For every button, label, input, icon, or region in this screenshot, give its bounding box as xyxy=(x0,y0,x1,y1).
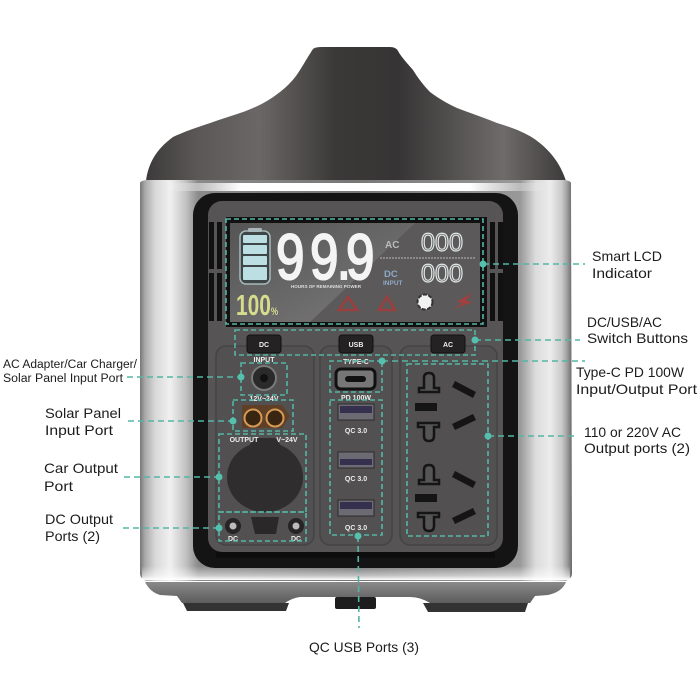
DC button xyxy=(247,335,281,353)
AC outlets xyxy=(415,373,476,531)
DC output ports: DC xyxy=(228,536,238,543)
vents right xyxy=(490,222,503,321)
device: power station xyxy=(140,47,572,612)
battery hours 99.9: 9 xyxy=(310,223,338,293)
front panel xyxy=(208,201,503,552)
percentage 100%: 100% xyxy=(236,290,278,322)
callout: solar input: Solar Panel xyxy=(45,405,121,421)
callout: AC adapter input: Solar Panel Input Port xyxy=(3,373,124,385)
callout: switch buttons xyxy=(235,314,688,355)
battery icon xyxy=(240,228,270,284)
callout: Type-C xyxy=(330,358,697,397)
input port: INPUT xyxy=(254,357,275,364)
solar panel port: 12V~24V xyxy=(250,396,279,403)
callout: AC adapter input xyxy=(3,359,287,395)
callout: Smart LCD Indicator: Smart LCD xyxy=(592,248,662,264)
car output port xyxy=(227,437,303,512)
callout: DC output: Ports (2) xyxy=(45,528,100,544)
hours caption: HOURS OF REMAINING POWER xyxy=(291,284,362,289)
lightning icon xyxy=(453,293,473,309)
foot right xyxy=(423,603,528,612)
QC USB ports: QC 3.0 xyxy=(345,428,367,435)
QC USB ports xyxy=(338,395,374,532)
vents left xyxy=(209,222,222,321)
input port xyxy=(252,357,276,390)
callout: Type-C: Input/Output Port xyxy=(576,381,697,397)
callout: AC outlets: Output ports (2) xyxy=(584,440,690,456)
battery hours 99.9: 9 xyxy=(276,223,304,293)
callout: solar input: Input Port xyxy=(45,422,113,438)
callout: solar input xyxy=(45,400,293,438)
USB button xyxy=(339,335,373,353)
LCD screen xyxy=(226,217,487,327)
top highlight band xyxy=(165,183,546,191)
callout: switch buttons: DC/USB/AC xyxy=(587,314,662,330)
car output port: OUTPUT xyxy=(230,437,259,444)
callout: Smart LCD Indicator: Indicator xyxy=(592,265,652,281)
divider xyxy=(380,257,475,259)
DC input label: DC xyxy=(384,269,398,280)
DC readout: 000 xyxy=(421,260,463,288)
callout: car output xyxy=(44,434,306,512)
foot left xyxy=(183,603,289,611)
battery hours 99.9 xyxy=(276,223,374,293)
callout: DC output: DC Output xyxy=(45,511,113,527)
foot centre xyxy=(335,597,376,609)
callout: QC USB: QC USB Ports (3) xyxy=(309,639,419,655)
base xyxy=(145,582,566,603)
port wells xyxy=(216,346,497,545)
USB button: USB xyxy=(349,342,363,349)
QC USB ports: PD 100W xyxy=(341,395,371,402)
Type-C port: TYPE-C xyxy=(343,359,369,366)
bottom highlight band xyxy=(142,566,570,580)
AC button: AC xyxy=(443,342,453,349)
metal body xyxy=(140,180,572,581)
callout: AC adapter input: AC Adapter/Car Charger/ xyxy=(3,359,138,371)
dark bezel xyxy=(193,193,518,568)
callout: DC output xyxy=(45,511,306,544)
panel lower shadow xyxy=(216,552,495,558)
callout: car output: Port xyxy=(44,478,73,494)
top cap xyxy=(146,47,566,181)
DC button: DC xyxy=(259,342,269,349)
AC button xyxy=(431,335,465,353)
callout: car output: Car Output xyxy=(44,460,118,476)
DC output ports xyxy=(225,517,304,543)
warning icon 2 xyxy=(379,297,395,310)
warning icon 1 xyxy=(339,297,357,310)
fan icon xyxy=(418,294,432,310)
Type-C port xyxy=(336,359,375,389)
callout: switch buttons: Switch Buttons xyxy=(587,330,688,346)
AC label: AC xyxy=(385,240,399,251)
battery hours 99.9: 9 xyxy=(346,223,374,293)
callout: AC outlets xyxy=(407,364,690,536)
solar panel port xyxy=(242,396,290,428)
car output port: V~24V xyxy=(276,437,298,444)
DC output ports: DC xyxy=(291,536,301,543)
callout: Smart LCD Indicator xyxy=(226,219,662,324)
QC USB ports: QC 3.0 xyxy=(345,476,367,483)
switch buttons xyxy=(247,335,465,353)
callout: Type-C: Type-C PD 100W xyxy=(576,364,685,380)
DC input sublabel: INPUT xyxy=(383,280,403,287)
callout: AC outlets: 110 or 220V AC xyxy=(584,424,681,440)
callout: QC USB xyxy=(309,400,419,655)
battery hours 99.9: . xyxy=(337,223,351,293)
QC USB ports: QC 3.0 xyxy=(345,525,367,532)
AC readout: 000 xyxy=(421,229,463,257)
